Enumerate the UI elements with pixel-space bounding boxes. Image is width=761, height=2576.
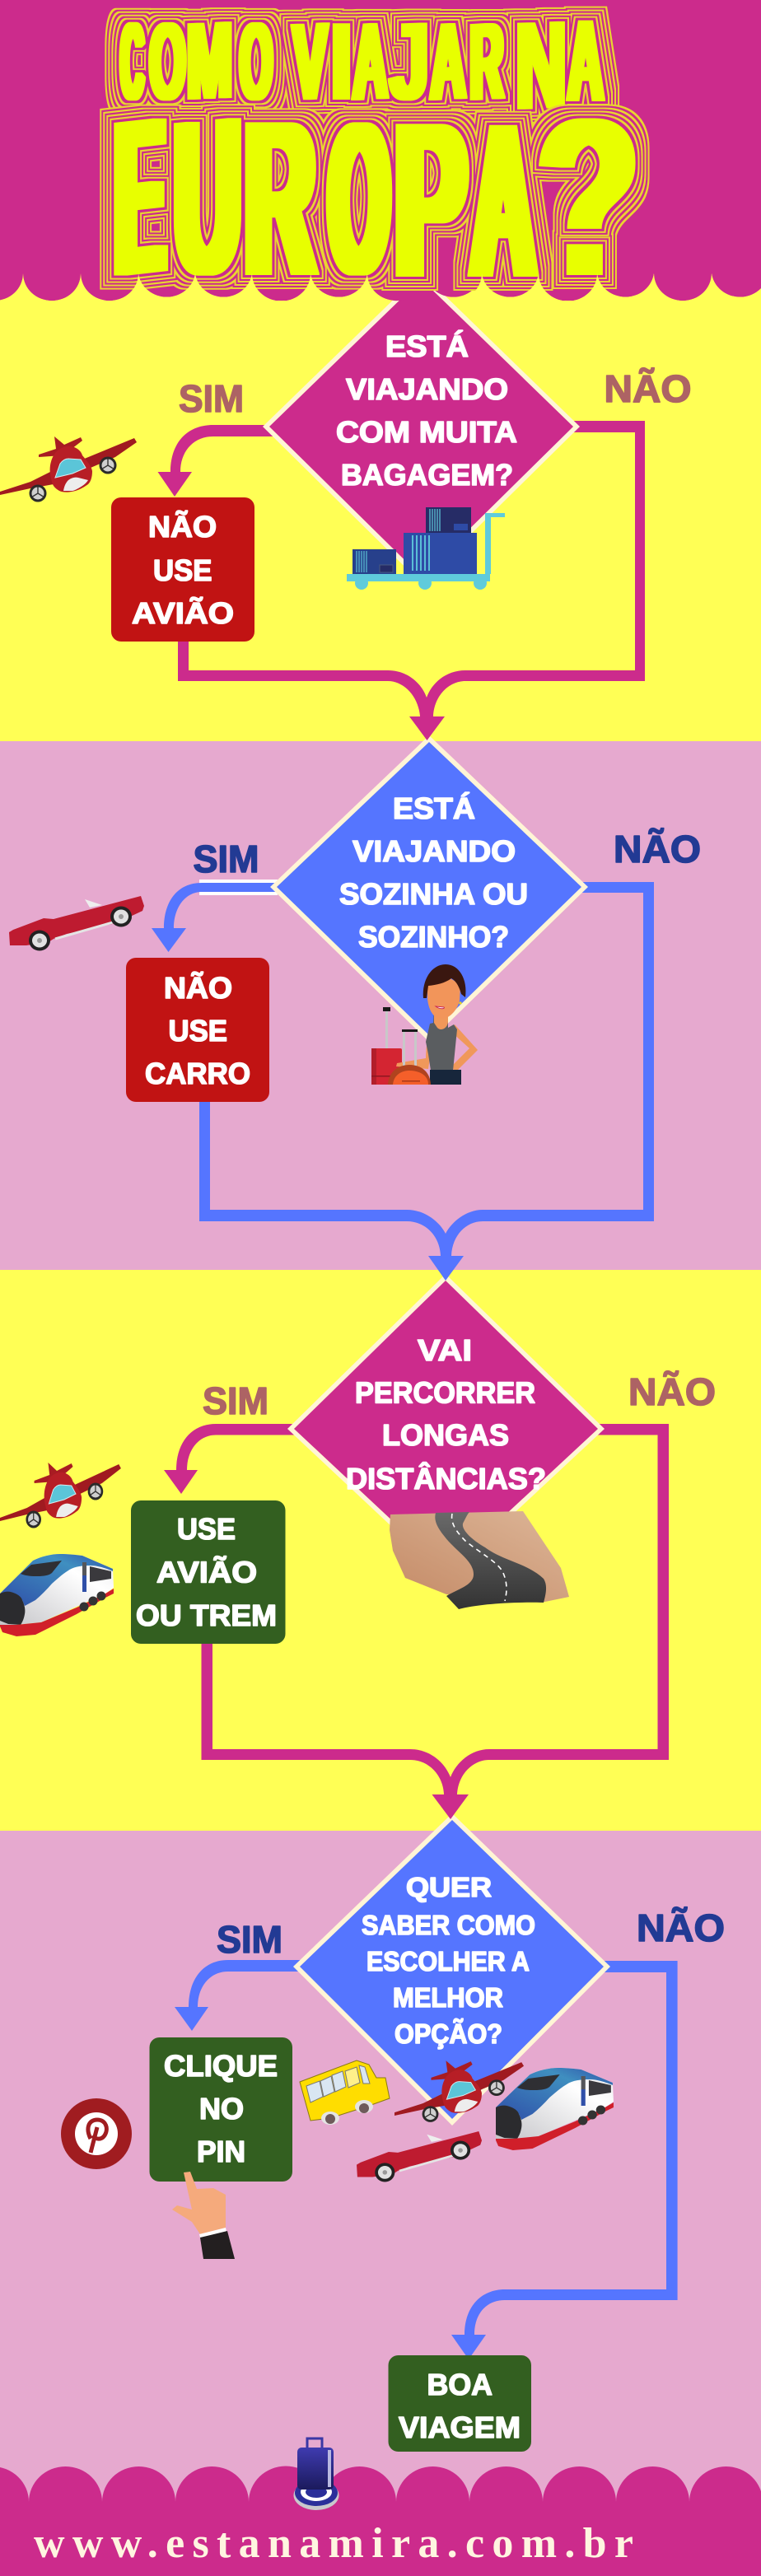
title: Europa?: A: [472, 78, 535, 322]
footer scallop band: [0, 2466, 761, 2576]
icon: airplane (question 3): [0, 1463, 121, 1528]
question 2 text: ESTÁ: [393, 791, 475, 825]
icon: airplane: [0, 436, 137, 502]
box: use avião ou trem: USE: [177, 1512, 236, 1546]
title: Europa?: [115, 72, 638, 323]
box: clique no pin: PIN: [197, 2135, 245, 2168]
question 1 text: BAGAGEM?: [341, 458, 513, 492]
title: Como viajar na: R: [470, 0, 503, 124]
title: Europa?: P: [395, 78, 466, 323]
icon: train (question 4): [496, 2068, 614, 2150]
label: NÃO 1: NÃO: [605, 367, 692, 410]
icon: woman with suitcases: [371, 964, 478, 1085]
box: não use carro: [126, 958, 269, 1102]
icon: red car (question 4): [357, 2131, 482, 2182]
box: não use avião: USE: [153, 553, 212, 587]
background: pink section 4: [0, 1831, 761, 2576]
label: NÃO 2: NÃO: [614, 828, 701, 870]
question 2 text: VIAJANDO: [352, 834, 516, 868]
question 1 text: ESTÁ: [385, 329, 469, 363]
box: não use avião: [111, 497, 254, 642]
title: Como viajar na: A: [431, 0, 465, 123]
header background with scallops: [0, 0, 761, 301]
title: Europa?: ?: [538, 74, 638, 322]
question 4 text: OPÇÃO?: [395, 2018, 502, 2049]
background: yellow section 1: [0, 272, 761, 741]
title: Como viajar na: [121, 0, 604, 135]
question 2 text: [339, 791, 528, 954]
title: Como viajar na: A: [353, 0, 387, 124]
arrow: question 3 SIM: [164, 1424, 305, 1494]
icon: winding road: [390, 1511, 569, 1609]
arrow: question 4 NÃO path to Boa Viagem: [451, 1961, 678, 2359]
title: Como viajar na: J: [390, 0, 429, 123]
label: SIM 2: SIM: [193, 838, 259, 880]
title: Europa?: O: [329, 77, 389, 322]
box: boa viagem: BOA: [427, 2368, 493, 2401]
title: Como viajar na: I: [331, 2, 352, 123]
title: Como viajar na: O: [240, 0, 273, 124]
question 3 text: DISTÂNCIAS?: [346, 1461, 546, 1496]
background: yellow section 3: [0, 1270, 761, 1831]
question 4 text: ESCOLHER A: [366, 1946, 530, 1976]
title: Como viajar na: C: [121, 0, 143, 124]
arrow: question 1 SIM: [158, 425, 276, 497]
title: Europa?: R: [245, 75, 315, 321]
question 1 text: VIAJANDO: [346, 372, 508, 406]
question 1 text: COM MUITA: [336, 415, 517, 449]
label: SIM 1: SIM: [179, 377, 244, 420]
box: use avião ou trem: [131, 1500, 285, 1644]
arrow: question 4 SIM: [175, 1960, 309, 2031]
arrow: question 3 NÃO and merge into question 4: [201, 1424, 669, 1819]
box: não use avião: AVIÃO: [132, 595, 234, 630]
label: NÃO 4: NÃO: [637, 1906, 725, 1949]
box: não use carro: CARRO: [145, 1057, 250, 1090]
question 4 text: [362, 1872, 535, 2049]
title: Como viajar na: V: [293, 0, 327, 123]
arrow: question 1 NÃO and merge into question 2: [178, 421, 645, 740]
title: Como viajar na: M: [187, 0, 232, 123]
background: pink section 2: [0, 741, 761, 1270]
icon: luggage cart: [347, 507, 505, 590]
box: não use carro: USE: [168, 1014, 227, 1048]
icon: pinterest: [61, 2098, 132, 2169]
box: use avião ou trem: OU TREM: [136, 1598, 277, 1632]
question 2 text: SOZINHA OU: [339, 877, 528, 911]
arrow: question 2 SIM: [152, 880, 284, 952]
box: clique no pin: [150, 2037, 292, 2182]
panel: question 1 diamond: [263, 273, 580, 583]
box: boa viagem: [389, 2355, 531, 2452]
title: Europa?: U: [175, 72, 240, 323]
label: SIM 4: SIM: [217, 1918, 282, 1961]
icon: airplane (question 4): [395, 2060, 524, 2122]
panel: question 2 diamond: [270, 735, 588, 1042]
icon: train (question 3): [0, 1554, 114, 1636]
icon: red car: [9, 896, 144, 950]
box: não use carro: NÃO: [164, 970, 232, 1005]
box: clique no pin: CLIQUE: [164, 2049, 278, 2083]
question 4 text: QUER: [406, 1872, 492, 1902]
title: Como viajar na: A: [567, 0, 604, 125]
box: boa viagem: VIAGEM: [399, 2410, 521, 2444]
box: use avião ou trem: AVIÃO: [156, 1555, 257, 1589]
question 3 text: PERCORRER: [355, 1375, 535, 1410]
icon: rolling suitcase on target: [293, 2438, 339, 2510]
question 4 text: SABER COMO: [362, 1910, 535, 1940]
icon: yellow bus: [300, 2060, 390, 2125]
label: NÃO 3: NÃO: [628, 1370, 716, 1413]
panel: question 3 diamond: [287, 1274, 605, 1577]
header scallop cusps over title: [0, 273, 761, 301]
question 3 text: [346, 1333, 546, 1496]
panel: question 4 diamond: [293, 1813, 610, 2126]
icon: pointing hand: [172, 2172, 235, 2259]
question 3 text: LONGAS: [382, 1418, 509, 1452]
question 2 text: SOZINHO?: [358, 920, 509, 954]
arrow: question 2 NÃO and merge into question 3: [199, 882, 654, 1281]
title: Europa?: E: [115, 72, 165, 323]
title: Como viajar na: O: [150, 0, 185, 124]
footer url: www.estanamira.com.br: [34, 2520, 633, 2567]
label: SIM 3: SIM: [203, 1379, 268, 1422]
question 4 text: MELHOR: [393, 1982, 503, 2013]
question 3 text: VAI: [418, 1333, 472, 1367]
question 1 text: [336, 329, 517, 492]
box: não use avião: NÃO: [148, 509, 217, 544]
box: clique no pin: NO: [199, 2092, 244, 2126]
